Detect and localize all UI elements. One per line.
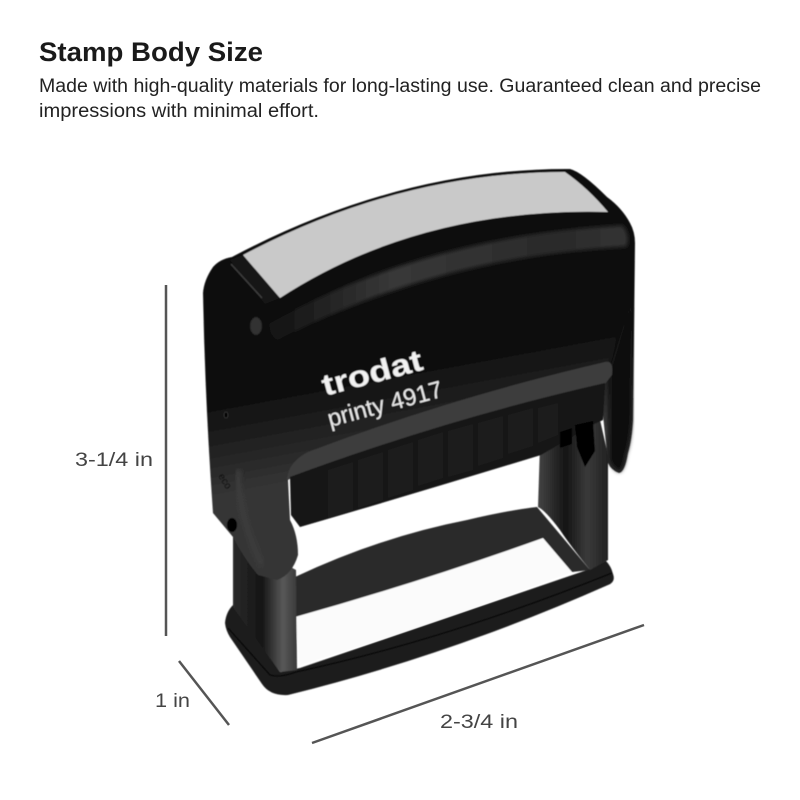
rear wall: [295, 507, 590, 617]
description text: [39, 76, 761, 122]
label edge: [230, 255, 280, 304]
title: Stamp Body Size: [39, 37, 263, 67]
small hole: [224, 412, 228, 418]
right tab gloss: [609, 300, 632, 472]
stamp illustration: [203, 169, 635, 695]
label latch line: [231, 264, 262, 298]
printing strip: [290, 383, 605, 527]
stamp body: [203, 169, 635, 580]
eco mark: eco: [215, 472, 234, 492]
height dimension line: [165, 285, 167, 636]
width dimension line: [312, 625, 644, 743]
depth label: 1 in: [155, 691, 190, 712]
label window: [243, 172, 608, 298]
body side sheen: [238, 470, 262, 565]
corner highlight: [250, 317, 262, 335]
height label: 3-1/4 in: [75, 450, 153, 471]
gray window frame: [287, 362, 612, 480]
base opening: [295, 538, 572, 665]
width label: 2-3/4 in: [440, 712, 518, 733]
depth dimension line: [179, 661, 229, 725]
side hole: [227, 518, 237, 532]
description text: Made with high-quality materials for long-lasting use. Guaranteed clean and precise: [39, 76, 761, 97]
trodat logo: trodat: [318, 344, 426, 403]
mechanism: [560, 421, 595, 467]
left column: [233, 535, 297, 672]
printy 4917: printy 4917: [325, 376, 446, 433]
description text: impressions with minimal effort.: [39, 101, 319, 122]
strip segments: [328, 403, 558, 518]
base top ledge: [228, 573, 612, 676]
top gloss band: [267, 225, 628, 342]
stamp base: [225, 561, 614, 695]
right column: [538, 420, 608, 570]
